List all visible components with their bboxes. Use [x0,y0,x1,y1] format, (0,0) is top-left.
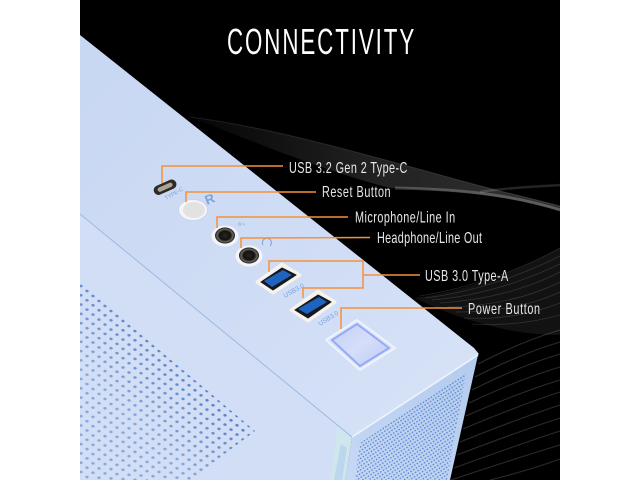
leader: power button [341,308,462,329]
label: Headphone/Line Out: Headphone/Line Out [377,229,482,246]
label: Reset Button: Reset Button [322,183,391,200]
title: CONNECTIVITY [227,23,414,62]
glass panel edge [330,426,352,480]
leader: microphone [217,217,348,228]
background light waves [190,117,560,480]
port: microphone jack: ⊪» [238,221,246,228]
leader: USB-C [162,166,283,183]
leader: reset button [186,192,316,202]
leader: USB 3.0 [269,261,420,298]
orange leader lines [162,166,462,329]
label: USB 3.2 Gen 2 Type-C: USB 3.2 Gen 2 Type-C [289,159,408,176]
port: reset button [178,190,217,220]
label: USB 3.0 Type-A: USB 3.0 Type-A [425,267,508,284]
mesh wave [415,248,560,335]
port: USB 3.0 lower [291,291,340,328]
side panel mesh [355,373,466,480]
case top surface [80,35,479,437]
port: USB 3.0 lower: USB3.0 [317,310,340,328]
label: Microphone/Line In: Microphone/Line In [355,209,455,226]
port: USB-C [152,178,185,202]
black background panel [80,0,560,480]
port: power button [326,320,395,370]
PC case body [80,35,479,480]
port: USB 3.0 upper [257,264,306,300]
case side panel [345,355,478,480]
port: reset button: R [203,190,217,208]
label: Power Button: Power Button [468,300,540,317]
case front panel [80,214,352,480]
leader: headphone [241,238,370,248]
lower curved lines [451,330,560,480]
port: headphone jack [236,238,271,266]
port: USB-C: TYPE-C [164,187,185,202]
front panel mesh [80,283,262,480]
port: microphone jack [212,221,246,246]
port: USB 3.0 upper: USB3.0 [282,282,306,300]
